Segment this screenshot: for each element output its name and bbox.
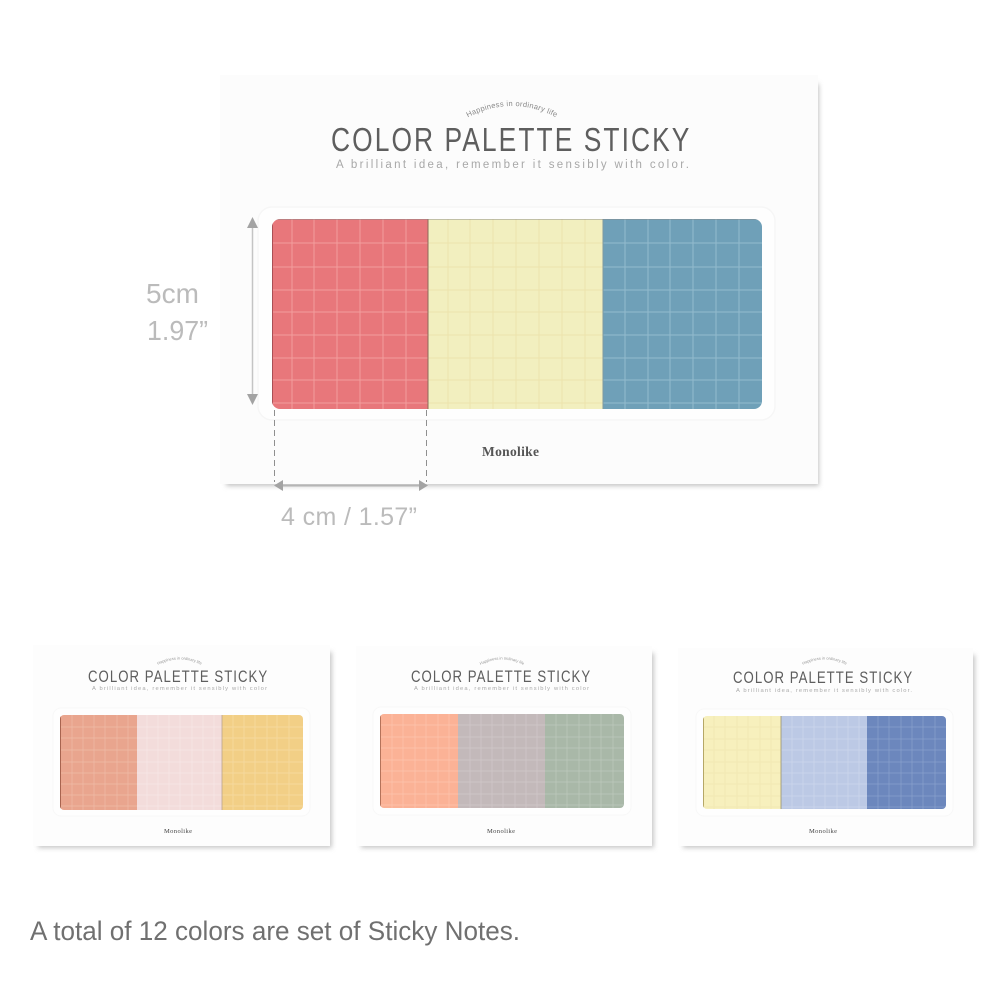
tagline arc: Happiness in ordinary life [466, 100, 557, 118]
card shadow [361, 653, 654, 848]
width dimension arrow [274, 480, 428, 491]
card shadow [226, 84, 819, 486]
height dimension arrow [247, 217, 258, 405]
tagline arc: Happiness in ordinary life [480, 656, 524, 665]
panel: main product card [224, 82, 822, 488]
subtitle: A brilliant idea, remember it sensibly with color. [336, 159, 689, 171]
brand name: Monolike [482, 444, 539, 459]
width dimension guides [274, 410, 426, 482]
height label: 5cm [146, 278, 199, 309]
panel: palette card 2 [359, 651, 656, 850]
panel: palette card 3 [681, 653, 978, 850]
card shadow [38, 652, 332, 848]
subtitle: A brilliant idea, remember it sensibly with color [92, 686, 267, 692]
window outline [373, 707, 631, 815]
card body [356, 646, 652, 846]
sticky notes: peach, taupe, sage [380, 714, 624, 808]
width label: 4 cm / 1.57” [281, 503, 417, 531]
window outline [53, 708, 310, 816]
card body [220, 75, 818, 484]
subtitle: A brilliant idea, remember it sensibly with color. [736, 688, 912, 694]
card body [678, 648, 973, 846]
caption: A total of 12 colors are set of Sticky Notes. [30, 916, 520, 946]
title: COLOR PALETTE STICKY [88, 668, 267, 686]
brand name: Monolike [809, 828, 837, 835]
sticky notes: red, yellow, blue [272, 219, 762, 409]
sticky notes: yellow, periwinkle, blue [703, 716, 946, 809]
title: COLOR PALETTE STICKY [733, 669, 912, 687]
brand name: Monolike [164, 828, 192, 835]
panel: palette card 1 [36, 650, 334, 850]
title: COLOR PALETTE STICKY [331, 122, 689, 159]
height label: 1.97” [147, 315, 208, 346]
tagline arc: Happiness in ordinary life [802, 656, 846, 665]
window outline [258, 207, 775, 420]
sticky notes: coral, pink, amber [60, 715, 303, 810]
tagline arc: Happiness in ordinary life [157, 656, 202, 665]
title: COLOR PALETTE STICKY [411, 668, 590, 686]
height label [146, 278, 208, 346]
window outline [696, 709, 953, 816]
brand name: Monolike [487, 828, 515, 835]
card body [33, 645, 330, 846]
subtitle: A brilliant idea, remember it sensibly with color [414, 686, 589, 692]
card shadow [683, 655, 975, 848]
